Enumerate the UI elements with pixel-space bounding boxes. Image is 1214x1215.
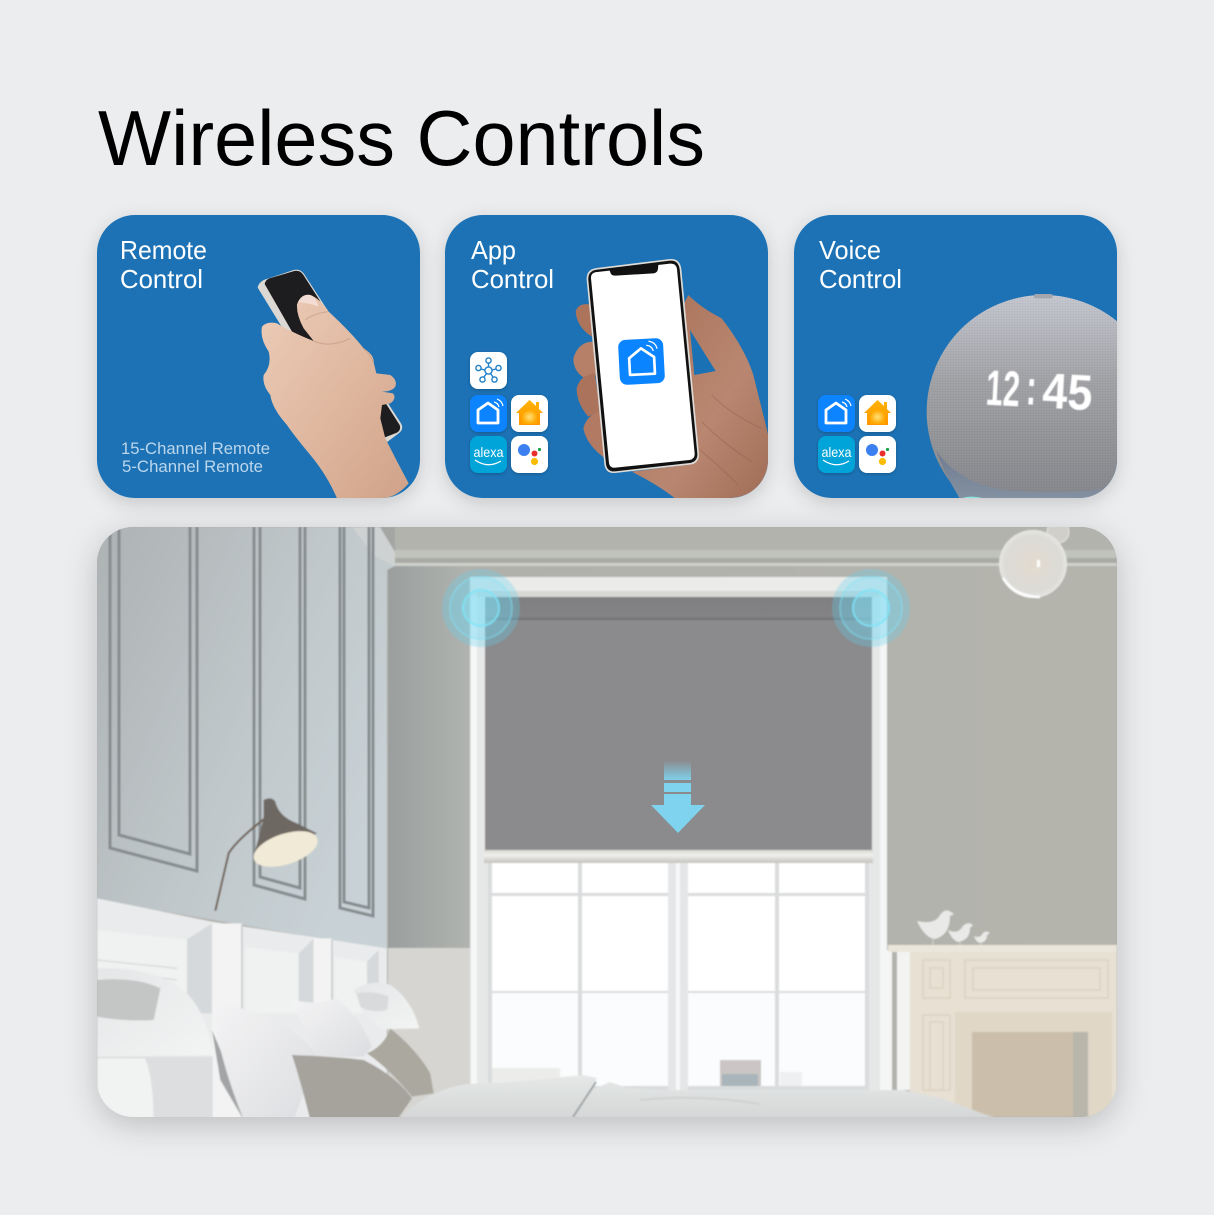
text: clock display: : bbox=[1025, 359, 1038, 416]
icon: smart life app bbox=[818, 395, 855, 432]
illustration: hand holding phone bbox=[573, 259, 769, 498]
illustration: hand holding remote bbox=[258, 270, 409, 498]
wainscot panels bbox=[97, 898, 387, 1120]
icon: google assistant bbox=[511, 436, 548, 473]
ceramic birds bbox=[917, 911, 990, 945]
fireplace mantel bbox=[884, 945, 1117, 1117]
heading: app control: App bbox=[471, 235, 516, 265]
panel: app control bbox=[445, 215, 769, 498]
text: clock display: 12 bbox=[985, 360, 1021, 418]
panel: voice control bbox=[788, 214, 1124, 510]
text: remote channel options: 15-Channel Remote bbox=[121, 440, 270, 458]
bedside lamps and pillows bbox=[97, 968, 434, 1120]
arrow: blind moving down bbox=[651, 760, 705, 833]
heading: voice control: Voice bbox=[819, 235, 881, 265]
heading: voice control: Control bbox=[819, 264, 902, 294]
back wall bbox=[388, 527, 1117, 1117]
title: Wireless Controls bbox=[98, 94, 705, 182]
icon: smart life app bbox=[470, 395, 507, 432]
icon: amazon alexa bbox=[818, 436, 855, 473]
pendant glass globe bbox=[999, 521, 1069, 598]
icon: google assistant bbox=[859, 436, 896, 473]
roller blind bbox=[477, 591, 879, 863]
icon: apple home bbox=[511, 395, 548, 432]
left wall with moulding bbox=[97, 527, 395, 950]
heading: remote control: Remote bbox=[120, 235, 207, 265]
icon: amazon alexa: alexa bbox=[822, 444, 852, 460]
heading: app control: Control bbox=[471, 264, 554, 294]
signal rings: left motor bbox=[442, 569, 520, 647]
icon: smart hub network bbox=[470, 352, 507, 389]
text: clock display: 45 bbox=[1041, 363, 1094, 421]
icon: amazon alexa bbox=[470, 436, 507, 473]
window frame and panes bbox=[470, 577, 887, 1090]
panel: bedroom scene with roller blind bbox=[97, 521, 1117, 1120]
wall lamp bbox=[215, 798, 322, 911]
text: remote channel options: 5-Channel Remote bbox=[122, 458, 263, 476]
heading: remote control: Control bbox=[120, 264, 203, 294]
icon: apple home bbox=[859, 395, 896, 432]
signal rings: right motor bbox=[832, 569, 910, 647]
illustration: smart speaker bbox=[926, 294, 1117, 498]
icon: amazon alexa: alexa bbox=[474, 444, 504, 460]
bed linen bbox=[400, 1075, 995, 1118]
panel: remote control bbox=[97, 215, 420, 498]
